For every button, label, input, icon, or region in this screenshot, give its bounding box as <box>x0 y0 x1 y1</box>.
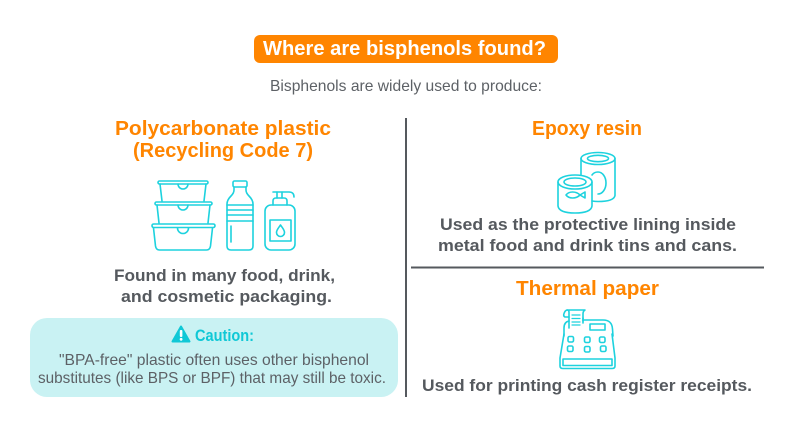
caution panel: Caution: <box>195 327 254 345</box>
title banner: Where are bisphenols found? <box>263 38 546 60</box>
icon: cash register <box>560 310 615 368</box>
heading: epoxy resin: Epoxy resin <box>532 118 642 140</box>
text: found in packaging: and cosmetic packaging. <box>121 287 332 306</box>
heading: thermal paper: Thermal paper <box>516 278 659 300</box>
heading: polycarbonate plastic: (Recycling Code 7) <box>133 140 313 162</box>
caution panel: "BPA-free" plastic often uses other bisphenol <box>59 352 369 369</box>
text: found in packaging: Found in many food, drink, <box>114 266 335 285</box>
icon: water bottle <box>227 181 253 250</box>
icon: pump bottle <box>265 192 295 250</box>
text: found in packaging <box>114 266 335 306</box>
caution panel: substitutes (like BPS or BPF) that may still be toxic. <box>38 370 386 387</box>
subtitle: Bisphenols are widely used to produce: <box>270 78 542 95</box>
heading: polycarbonate plastic <box>115 118 331 162</box>
heading: polycarbonate plastic: Polycarbonate plastic <box>115 118 331 140</box>
icon: food containers <box>152 181 215 250</box>
icon: food cans <box>558 152 615 213</box>
icon: warning triangle <box>172 326 190 342</box>
text: thermal paper use: Used for printing cash register receipts. <box>422 376 752 395</box>
text: epoxy resin use: metal food and drink tins and cans. <box>438 236 737 255</box>
text: epoxy resin use <box>438 215 737 255</box>
vertical divider <box>405 118 407 397</box>
text: epoxy resin use: Used as the protective lining inside <box>440 215 736 234</box>
horizontal divider <box>411 266 764 268</box>
caution panel <box>30 318 398 397</box>
